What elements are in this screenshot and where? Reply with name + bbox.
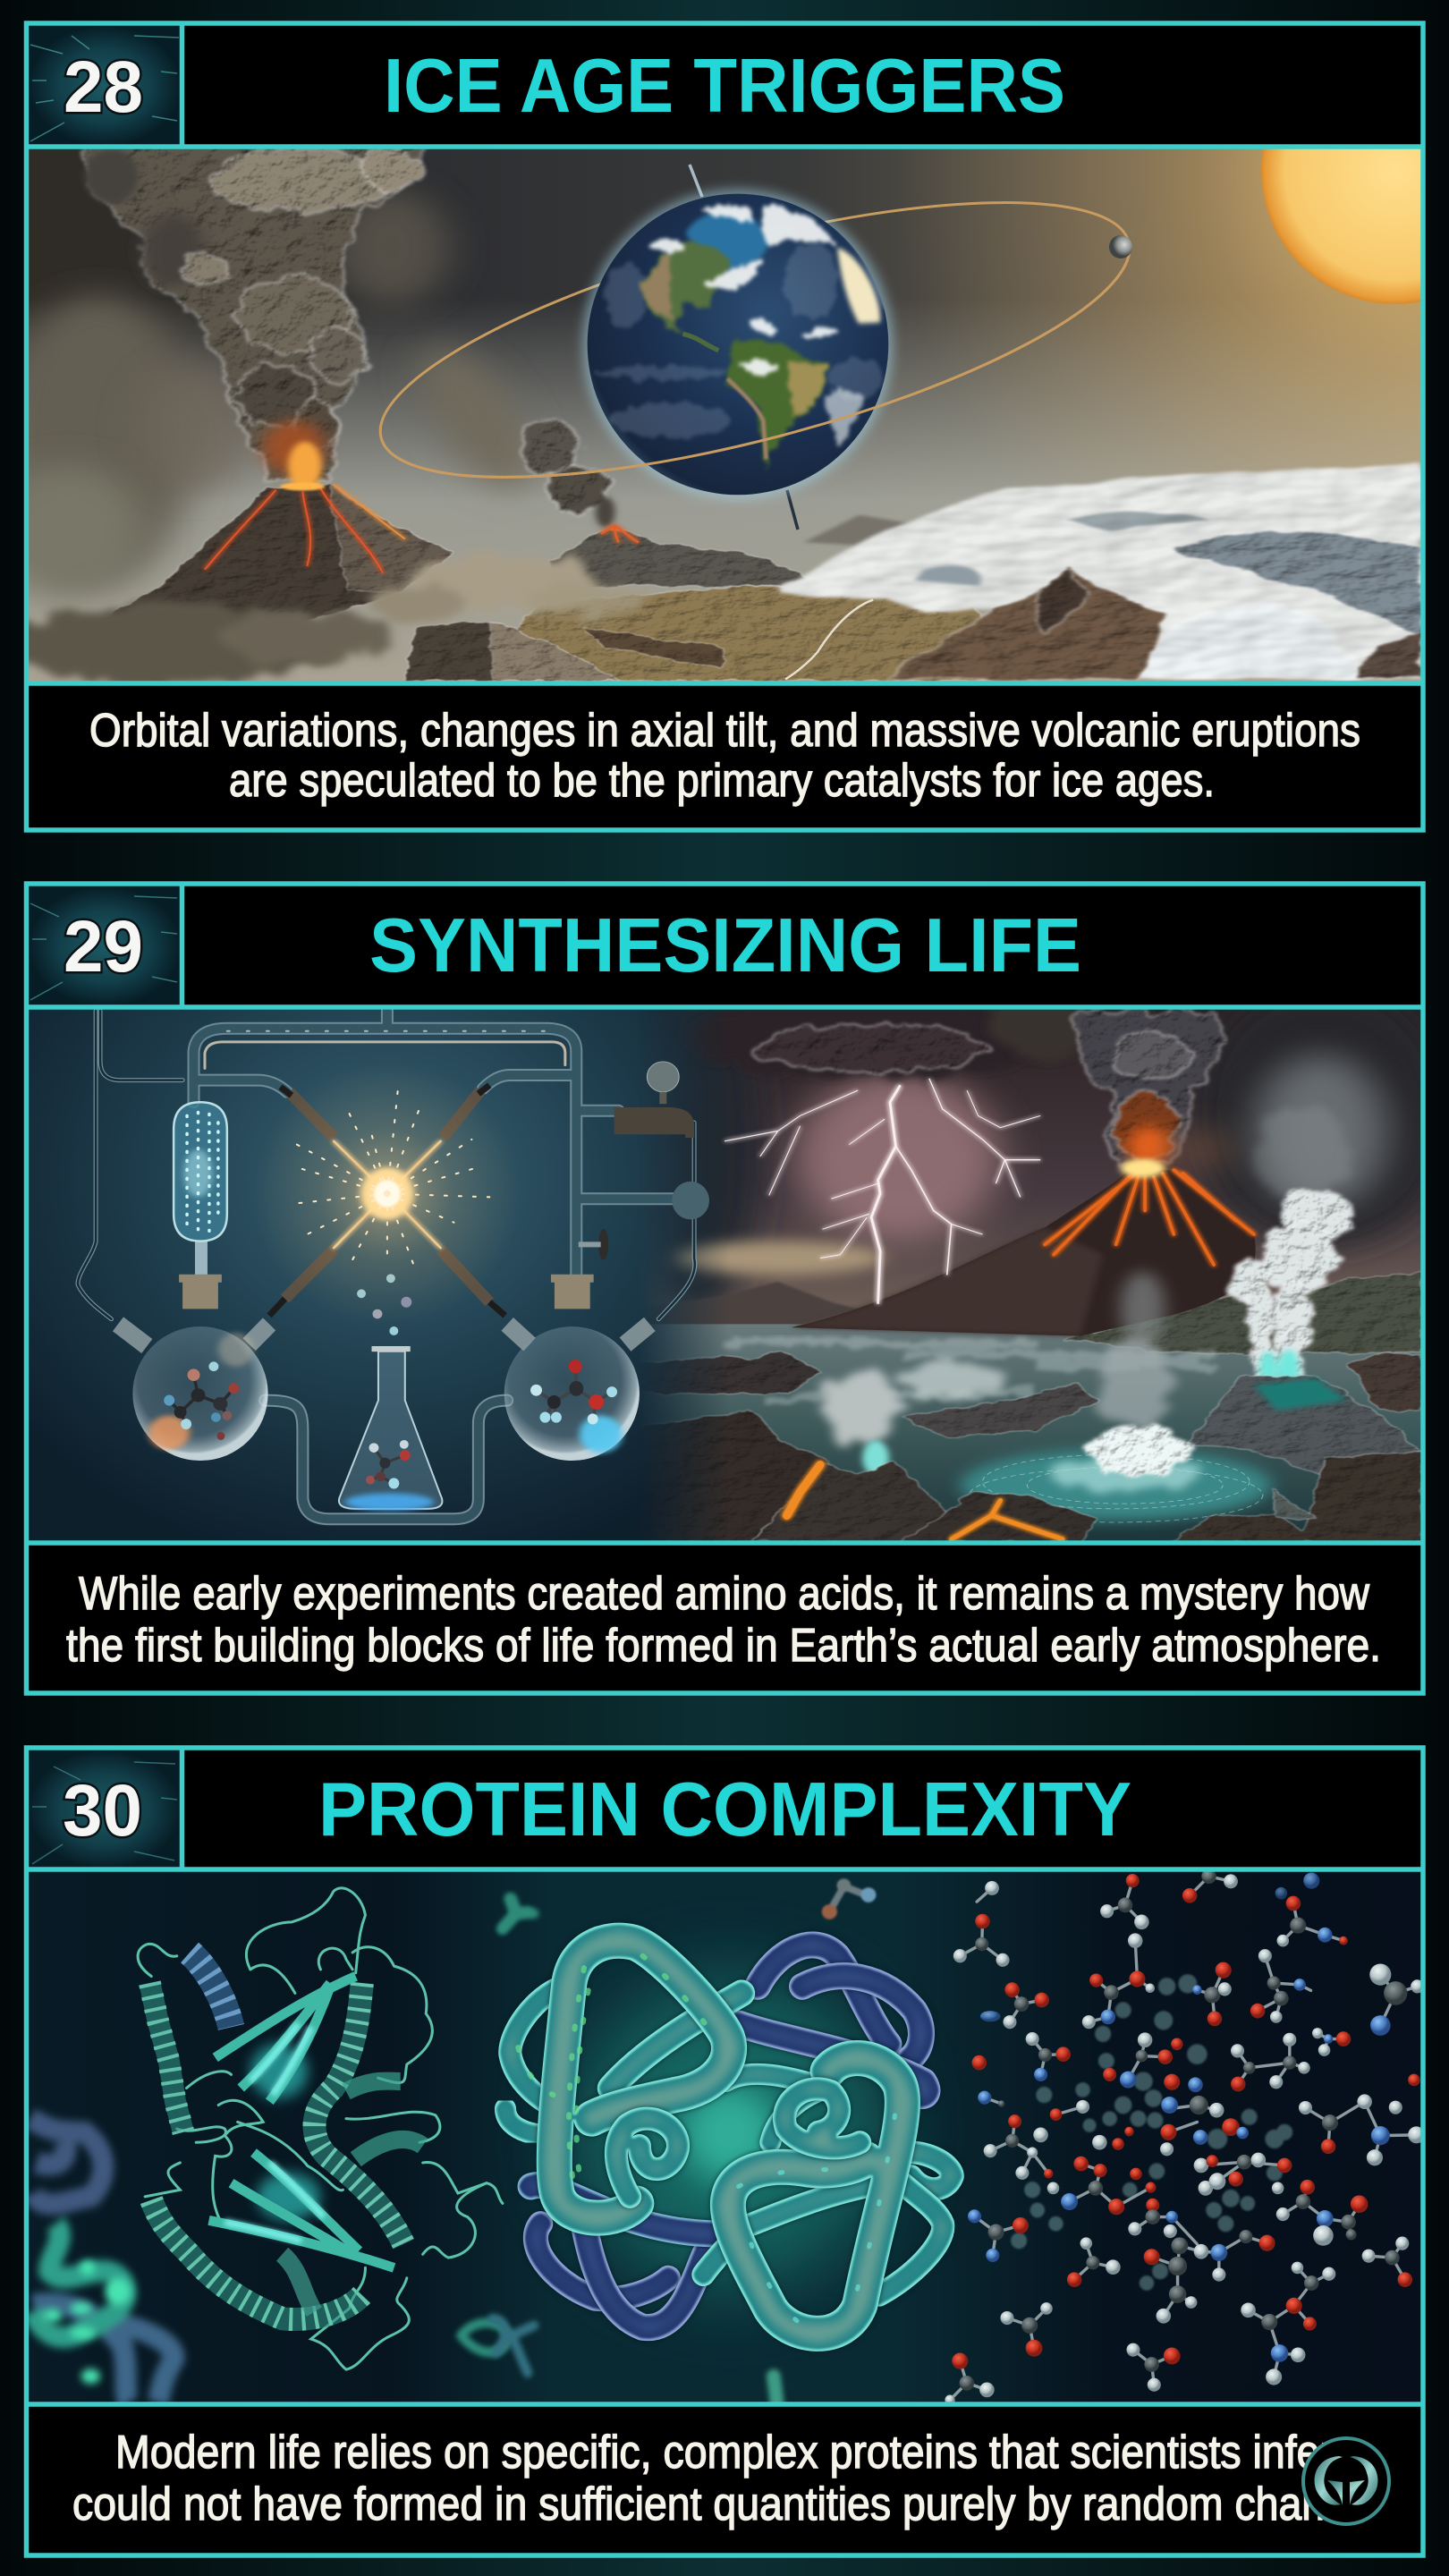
backbone loops (138, 1888, 503, 2369)
beta sheets (208, 1976, 394, 2267)
outer thin tubes (78, 1011, 695, 1319)
header bar (182, 1750, 1421, 1869)
right flask (504, 1326, 640, 1461)
hills (1063, 1272, 1422, 1353)
panel 30: protein complexity (27, 1748, 1425, 2555)
blurred centre cluster (1011, 1974, 1292, 2291)
heading: SYNTHESIZING LIFE (369, 903, 1081, 988)
distant volcano and plume (547, 529, 827, 587)
stoppers (179, 1275, 594, 1309)
blurred small molecules (462, 1898, 528, 2352)
steam cloud upper right (1254, 1055, 1387, 1210)
caption box (27, 684, 1423, 829)
vent rock (1187, 1375, 1422, 1475)
purple strands (531, 1945, 927, 2327)
heading: ICE AGE TRIGGERS (384, 44, 1065, 129)
teal geyser base (1259, 1350, 1300, 1390)
number tile 30: 30 (63, 1770, 142, 1852)
caption box: are speculated to be the primary catalysts for ice ages. (229, 755, 1215, 807)
number tile 28: 28 (64, 47, 143, 128)
panel 28: ice age triggers (0, 0, 1449, 830)
header bar (182, 886, 1421, 1007)
spark (254, 1062, 521, 1326)
number tile 29: 29 (64, 906, 143, 987)
distant rocks and waves (591, 1350, 822, 1394)
header bar (182, 26, 1421, 147)
electrodes (269, 1085, 505, 1316)
plume (1076, 1011, 1220, 1163)
scattered molecules (945, 1868, 1425, 2405)
number tile 29 (29, 886, 181, 1006)
primordial scene (591, 977, 1449, 1545)
glaciers and mountains (785, 464, 1423, 679)
logo emblem (1303, 2411, 1419, 2545)
helices (149, 1953, 423, 2319)
number tile 28 (29, 26, 181, 146)
flask side necks (118, 1324, 649, 1346)
atoms (945, 1868, 1425, 2405)
volcano (113, 484, 453, 619)
bonds (950, 1877, 1418, 2400)
illustration: lab apparatus and primordial earth (0, 801, 1449, 1588)
heading: PROTEIN COMPLEXITY (318, 1767, 1131, 1852)
caption box: Modern life relies on specific, complex proteins that scientists infer (115, 2427, 1334, 2479)
number tile 30 (29, 1750, 181, 1868)
caption box (27, 1545, 1423, 1692)
small steam vent (818, 1371, 898, 1443)
storm lightning (724, 1079, 1040, 1304)
left flask (132, 1326, 268, 1461)
orbit ring (behind earth) (356, 146, 1154, 534)
icon: gauge and valve (579, 1062, 709, 1260)
swirling water and foam (961, 1450, 1272, 1521)
icon: small moon on orbit (1109, 235, 1132, 258)
lower U tube (265, 1401, 507, 1519)
glass manifold (194, 1011, 676, 1275)
apparatus: glass tubing, electrodes, flasks (78, 1011, 709, 1519)
sea waves (724, 1341, 1214, 1401)
earth (583, 190, 893, 499)
condenser column (174, 1102, 227, 1241)
smoke plumes and volcano scene (0, 142, 1028, 685)
caption box (27, 2406, 1423, 2554)
foreground rocks and lava (591, 1411, 831, 1542)
white steam geyser (1231, 1189, 1352, 1390)
blurred small molecules (493, 1898, 776, 2402)
droplets (357, 1274, 411, 1335)
orbit ring (front arc) (381, 242, 1154, 534)
green surface flecks (518, 1956, 716, 2176)
small blurred molecule top (822, 1878, 876, 1919)
axis line (690, 165, 798, 530)
ribbon protein and blurred neighbour (30, 1888, 528, 2402)
main ash plume (84, 142, 423, 481)
erlenmeyer flask (339, 1346, 442, 1511)
icon: sun (1261, 148, 1420, 304)
illustration: proteins and scattered molecules (28, 1868, 1425, 2405)
ground and near ridge (471, 587, 1028, 681)
illustration: volcanoes, earth and orbit over glaciers (29, 148, 1420, 682)
low smoke (410, 555, 597, 612)
erupting volcano (792, 1170, 1256, 1336)
teal strands (505, 1941, 953, 2334)
knotted tube protein (493, 1878, 953, 2402)
panel 29: synthesizing life (0, 801, 1449, 1693)
